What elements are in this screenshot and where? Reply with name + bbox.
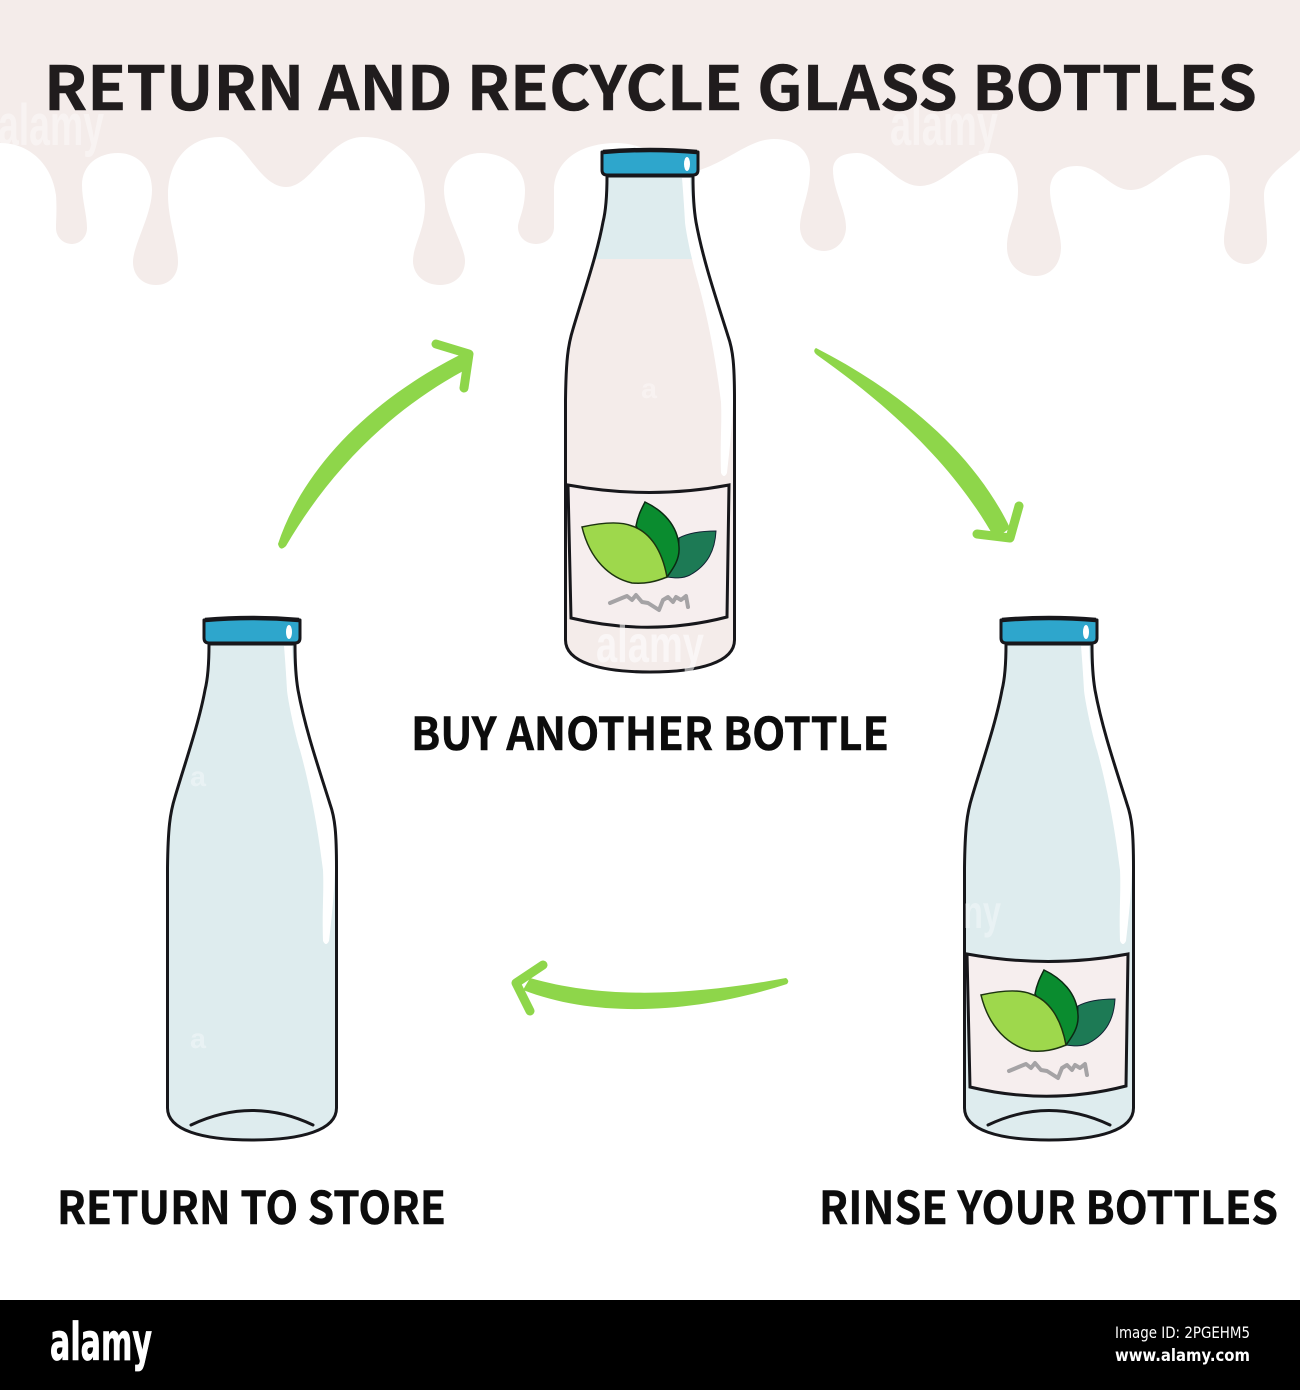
watermark: bottle fragments: ny	[963, 886, 1001, 938]
bottle outline	[168, 644, 336, 1140]
glass shine	[284, 646, 335, 944]
bottle: rinsed bottle with label	[964, 618, 1134, 1140]
watermark: bottle fragments: a	[190, 1023, 206, 1054]
bottle outline	[964, 644, 1134, 1140]
cap	[1001, 618, 1097, 643]
watermark: top right: alamy	[890, 93, 998, 158]
watermark: bottle fragments: a	[190, 761, 206, 792]
product label	[568, 485, 729, 627]
glass shine	[682, 178, 733, 476]
arrow: rinse to return	[516, 965, 788, 1011]
footer logo: alamy	[50, 1313, 152, 1373]
bottle: full milk bottle with label	[560, 150, 740, 679]
cap	[204, 618, 300, 643]
glass fill	[168, 644, 336, 1140]
glass fill	[964, 644, 1134, 1140]
footer bar	[0, 1300, 1300, 1390]
caption: buy another bottle: BUY ANOTHER BOTTLE	[411, 698, 889, 763]
watermark: bottle fragments: a	[641, 373, 657, 404]
arrow: return to buy	[278, 344, 470, 549]
product label	[967, 954, 1128, 1096]
watermark: top left: alamy	[0, 93, 104, 158]
caption: return to store: RETURN TO STORE	[57, 1172, 446, 1237]
cap	[602, 150, 698, 175]
base curve	[191, 1110, 313, 1125]
title: RETURN AND RECYCLE GLASS BOTTLES	[44, 39, 1257, 128]
arrow: buy to rinse	[814, 348, 1019, 539]
leaf logo	[981, 970, 1115, 1078]
leaf logo	[582, 502, 716, 610]
bottle: empty clean bottle	[168, 618, 336, 1140]
bottle outline	[566, 176, 734, 672]
caption: rinse your bottles: RINSE YOUR BOTTLES	[819, 1172, 1278, 1237]
milk drip background	[0, 0, 1300, 285]
base curve	[988, 1110, 1110, 1125]
watermark: bottle fragments	[190, 373, 1001, 1054]
website: www.alamy.com	[1115, 1346, 1250, 1366]
milk fill	[560, 259, 740, 679]
glass shine	[1081, 646, 1132, 944]
watermark on bottle: alamy	[596, 616, 704, 674]
glass fill	[566, 176, 734, 672]
image id: Image ID: 2PGEHM5	[1115, 1323, 1250, 1342]
